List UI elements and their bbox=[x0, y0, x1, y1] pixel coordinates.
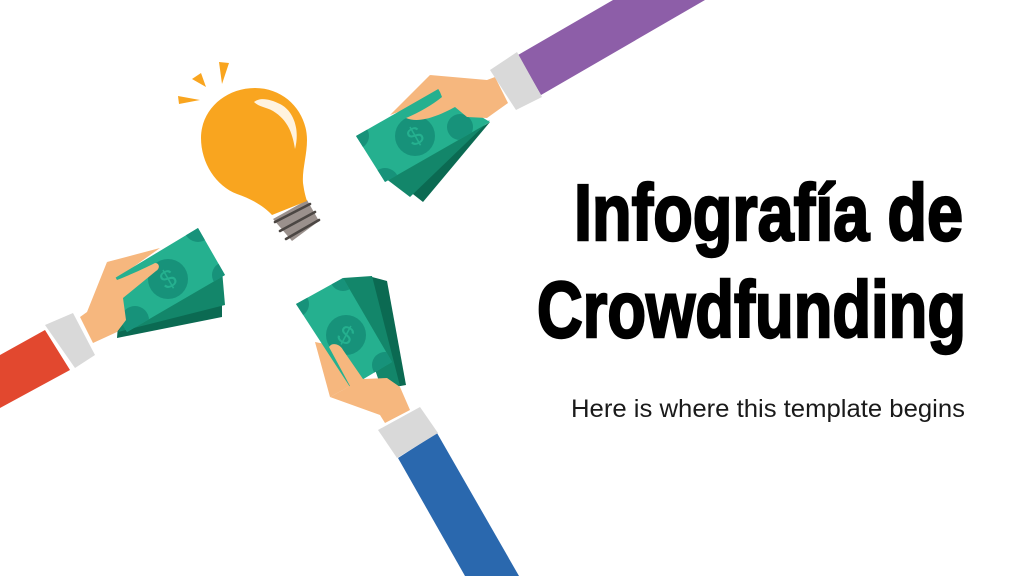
money stack bbox=[296, 276, 406, 386]
subtitle: Here is where this template begins bbox=[571, 395, 965, 423]
dollar sign: $ bbox=[154, 262, 182, 296]
fingers behind money bbox=[107, 248, 160, 280]
red sleeve bbox=[0, 330, 70, 408]
fingers behind money bbox=[390, 75, 445, 115]
bulb glass bbox=[201, 88, 307, 215]
bulb highlight bbox=[254, 99, 297, 149]
dollar sign: $ bbox=[333, 318, 360, 352]
money stack bbox=[343, 88, 490, 202]
cuff bbox=[45, 313, 95, 368]
cuff bbox=[490, 52, 542, 110]
palm and thumb bbox=[406, 75, 508, 120]
icon: light bulb bbox=[178, 62, 319, 241]
purple sleeve bbox=[518, 0, 705, 95]
cuff bbox=[378, 407, 438, 458]
hand: top right with purple sleeve bbox=[343, 0, 705, 202]
palm and thumb bbox=[80, 262, 159, 343]
fingers behind money bbox=[315, 342, 352, 397]
blue sleeve bbox=[398, 433, 519, 576]
title bbox=[537, 168, 966, 354]
money stack bbox=[116, 228, 225, 338]
bulb socket bbox=[273, 200, 319, 241]
bulb rays bbox=[178, 62, 229, 104]
hand: left with red sleeve bbox=[0, 228, 225, 408]
dollar sign: $ bbox=[401, 119, 429, 153]
palm and thumb bbox=[329, 344, 410, 423]
hand: bottom with blue sleeve bbox=[283, 265, 519, 576]
